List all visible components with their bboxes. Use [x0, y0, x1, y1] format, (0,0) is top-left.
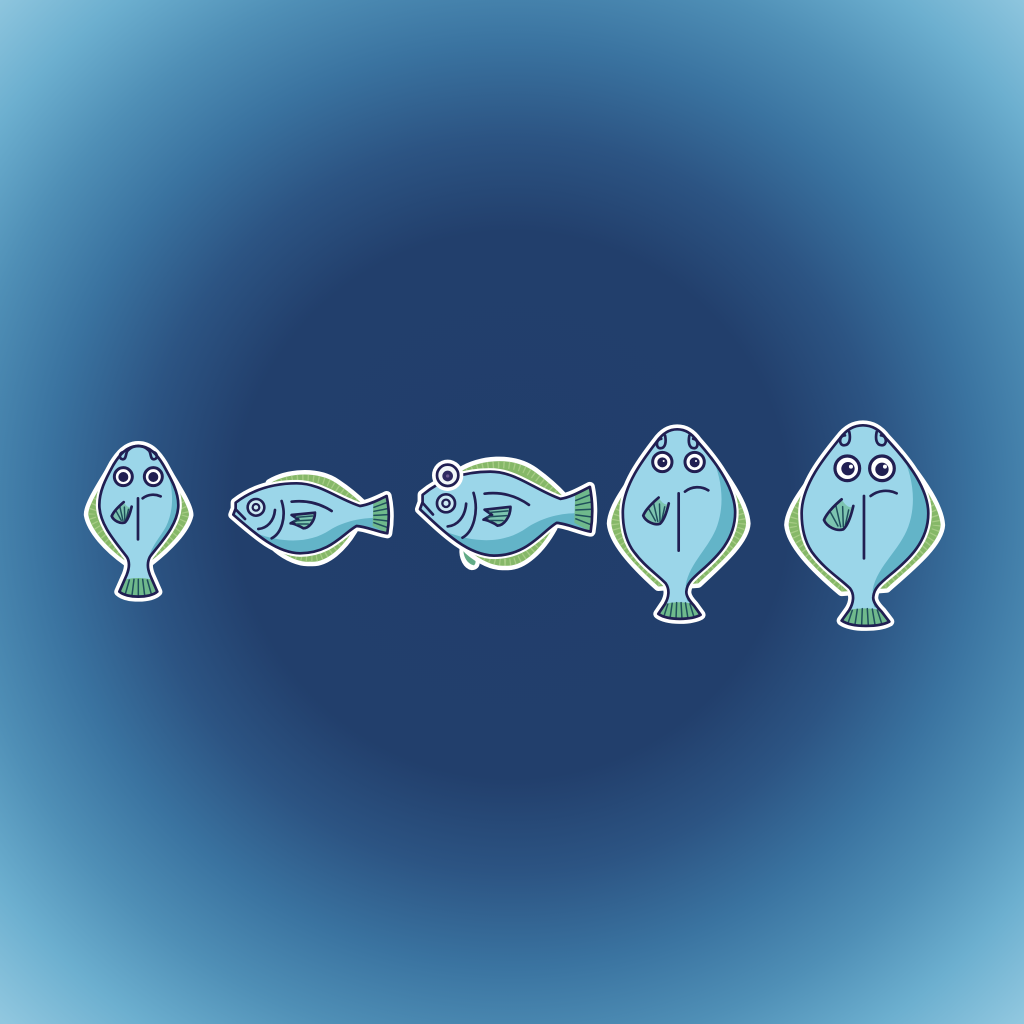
fish 1 pectoral fin [112, 502, 132, 523]
fish 3 lower eye [437, 494, 455, 512]
fish 5: large flatfish, top view [789, 425, 941, 626]
fish 4 eyes [653, 452, 704, 472]
fish 3 migrating eye on top [432, 460, 463, 491]
fish 5 pectoral fin [824, 499, 853, 530]
fish 2 eye [248, 499, 264, 516]
fish 4: flatfish, top view [611, 429, 746, 619]
fish 4 pectoral fin [643, 498, 669, 524]
fish 2: side view flatfish [233, 475, 389, 562]
fish 5 eyes [835, 456, 894, 481]
fish 3 lower fin [461, 548, 478, 569]
fish 1: small flatfish, top view [88, 446, 189, 597]
fish 1 eyes [114, 468, 162, 486]
illustration: five flatfish [84, 420, 946, 631]
fish 3: side view flatfish with migrating eye [420, 460, 592, 569]
